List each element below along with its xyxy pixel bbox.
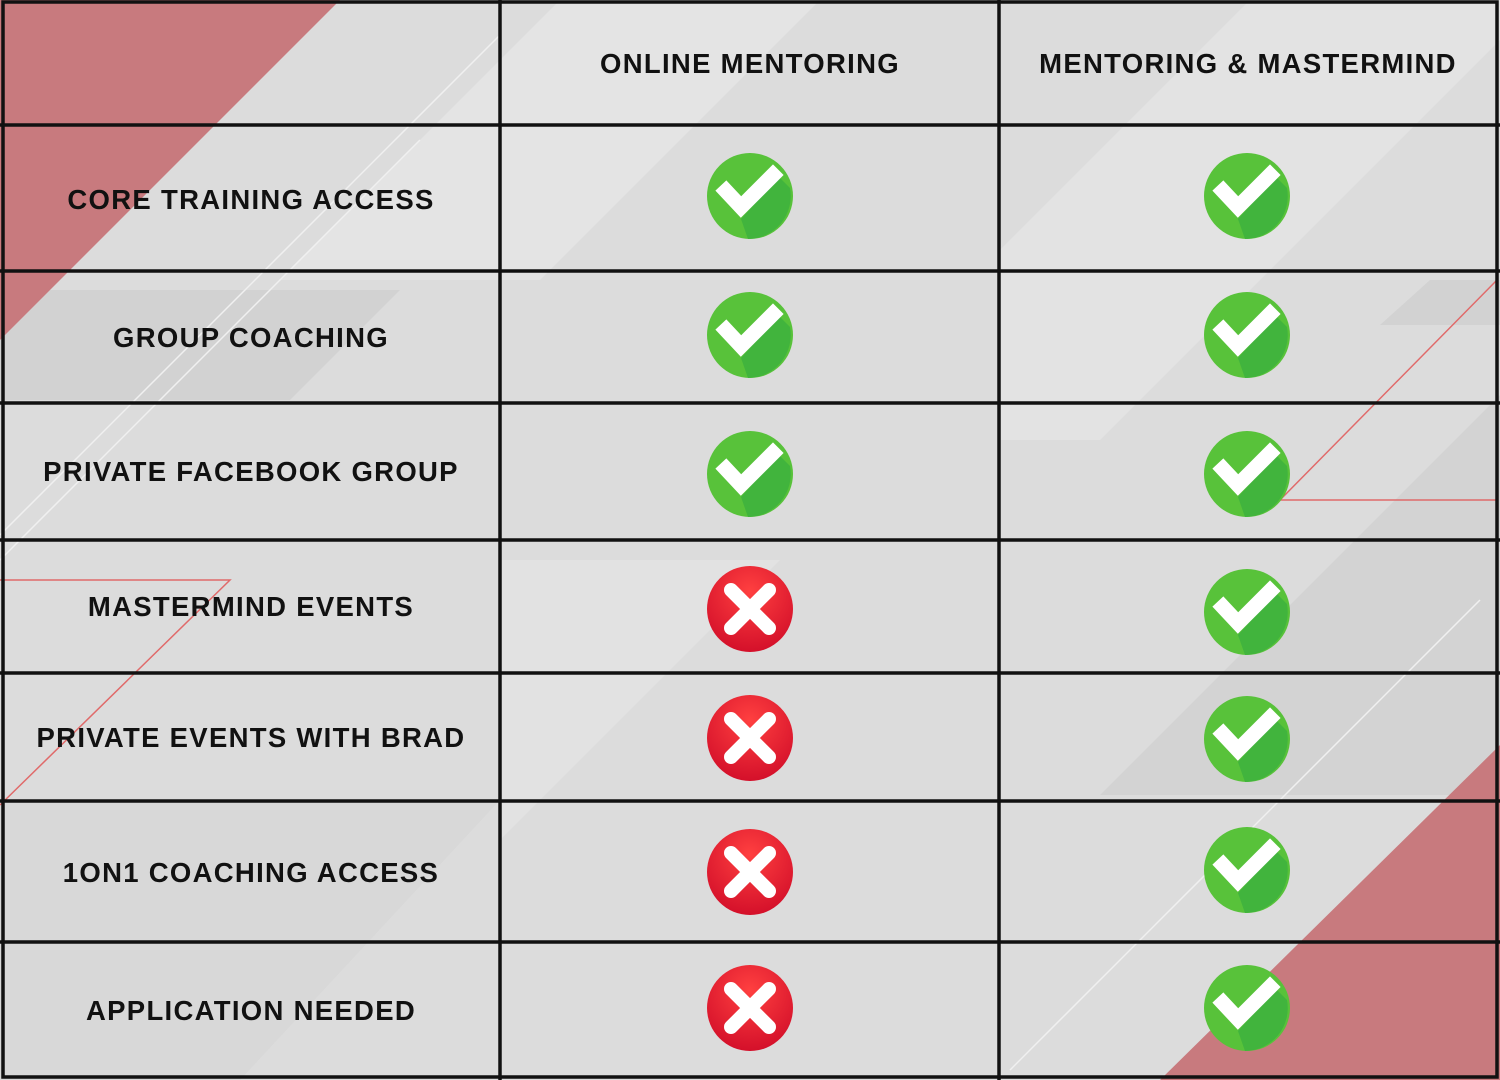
row labels: PRIVATE EVENTS WITH BRAD — [37, 722, 465, 753]
row labels: APPLICATION NEEDED — [86, 995, 416, 1026]
row labels: PRIVATE FACEBOOK GROUP — [43, 456, 459, 487]
row labels: 1ON1 COACHING ACCESS — [63, 857, 439, 888]
row labels — [37, 184, 465, 1026]
column headers: ONLINE MENTORING — [600, 48, 900, 79]
column headers: MENTORING & MASTERMIND — [1039, 48, 1457, 79]
column headers — [600, 48, 1457, 79]
icons: mentoring & mastermind — [1204, 153, 1290, 1051]
row labels: GROUP COACHING — [113, 322, 389, 353]
row labels: CORE TRAINING ACCESS — [67, 184, 435, 215]
row labels: MASTERMIND EVENTS — [88, 591, 414, 622]
icons: online mentoring — [707, 153, 793, 1051]
